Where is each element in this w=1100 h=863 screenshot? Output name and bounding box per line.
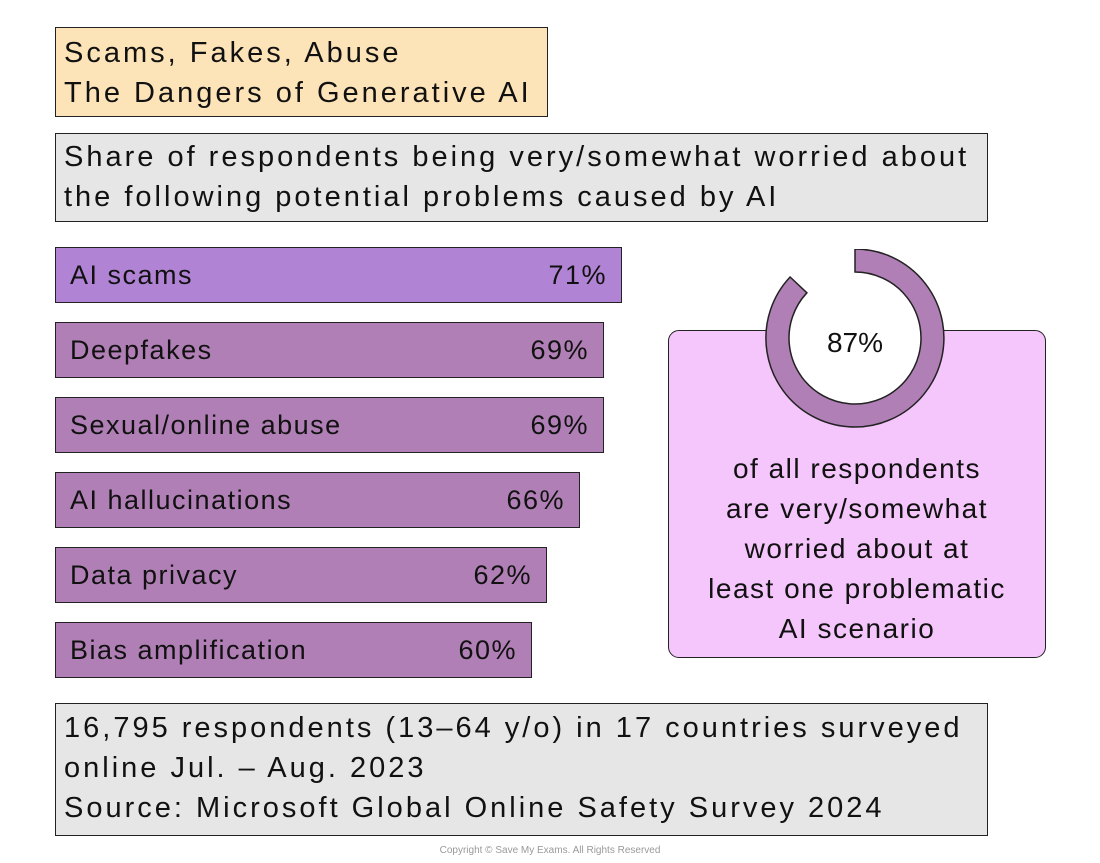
bar: AI scams: AI scams <box>70 260 193 290</box>
callout text: AI scenario <box>779 613 935 644</box>
title: Scams, Fakes, Abuse <box>64 37 401 69</box>
bar: Deepfakes: 69% <box>530 334 589 364</box>
bar: Sexual/online abuse: Sexual/online abuse <box>70 410 342 440</box>
bar: Deepfakes <box>55 322 604 378</box>
footer source <box>55 703 988 836</box>
bar chart <box>55 247 622 678</box>
subtitle: Share of respondents being very/somewhat worried about <box>64 141 969 173</box>
bar: Bias amplification: Bias amplification <box>70 634 307 664</box>
title <box>55 27 548 117</box>
callout text: of all respondents <box>733 453 981 484</box>
callout text: are very/somewhat <box>726 493 988 524</box>
donut chart <box>765 249 945 428</box>
copyright: Copyright © Save My Exams. All Rights Reserved <box>440 845 660 856</box>
bar: Sexual/online abuse <box>55 397 604 453</box>
bar: Data privacy: Data privacy <box>70 560 238 590</box>
bar: Bias amplification: 60% <box>458 634 517 664</box>
bar: AI hallucinations: 66% <box>506 484 565 514</box>
panel: 87% callout <box>668 249 1046 658</box>
bar: Data privacy <box>55 547 547 603</box>
bar: Data privacy: 62% <box>473 560 532 590</box>
bar: AI scams <box>55 247 622 303</box>
footer source: Source: Microsoft Global Online Safety Survey 2024 <box>64 792 885 824</box>
bar: Deepfakes: Deepfakes <box>70 334 213 364</box>
callout text: worried about at <box>745 533 969 564</box>
bar: Sexual/online abuse: 69% <box>530 410 589 440</box>
donut chart: 87% <box>827 327 883 358</box>
callout text: least one problematic <box>708 573 1006 604</box>
footer source: online Jul. – Aug. 2023 <box>64 752 426 784</box>
subtitle: the following potential problems caused by AI <box>64 181 779 213</box>
footer source: 16,795 respondents (13–64 y/o) in 17 countries surveyed <box>64 712 963 744</box>
title: The Dangers of Generative AI <box>64 77 532 109</box>
bar: Bias amplification <box>55 622 532 678</box>
callout text <box>708 453 1006 644</box>
bar: AI hallucinations: AI hallucinations <box>70 484 292 514</box>
bar: AI hallucinations <box>55 472 580 528</box>
subtitle <box>55 133 988 222</box>
bar: AI scams: 71% <box>548 260 607 290</box>
